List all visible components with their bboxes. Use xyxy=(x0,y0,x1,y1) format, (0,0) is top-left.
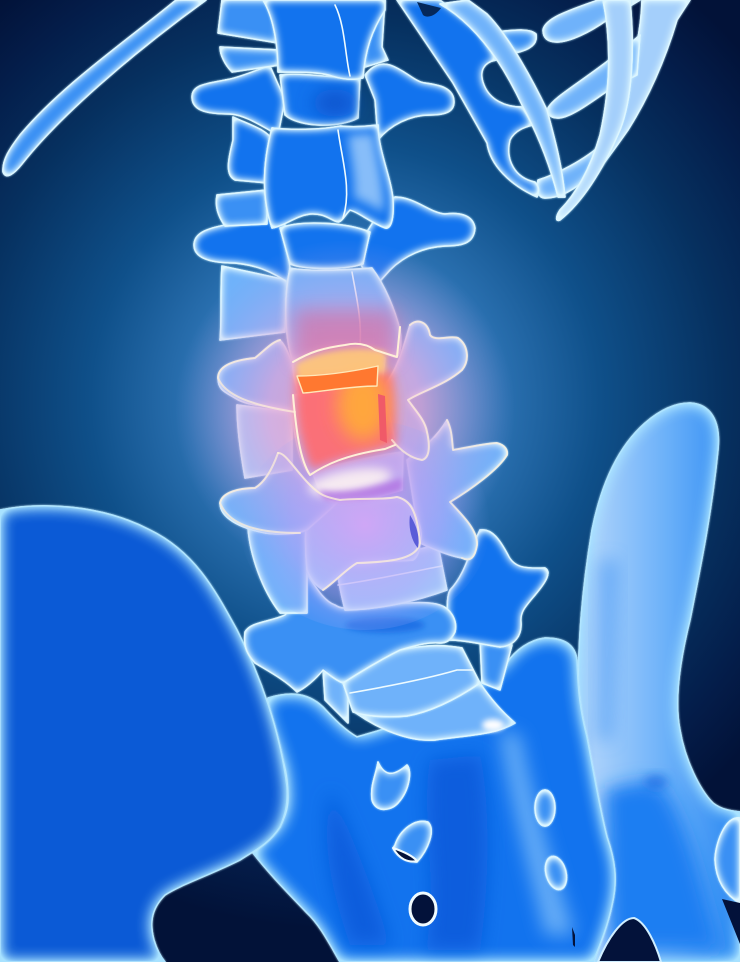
ribs: upper right rib cage xyxy=(397,0,690,220)
highlight: purple lower glow xyxy=(240,420,490,630)
vertebra L4 xyxy=(220,420,507,613)
sacrum: top platform xyxy=(356,683,515,740)
rib: stub xyxy=(495,30,536,53)
pain: pink upper body xyxy=(295,310,395,362)
L2: left lamina xyxy=(220,266,287,340)
sacrum: side foramen upper xyxy=(535,790,555,826)
pain: outline L4 left process xyxy=(220,453,300,533)
L3: body xyxy=(293,384,395,475)
L3: disc xyxy=(293,345,385,396)
L3: right process xyxy=(385,322,467,460)
pain: outline L2 body xyxy=(293,327,400,362)
wing: dark arch at bottom xyxy=(598,918,661,962)
L1: body xyxy=(264,125,393,228)
L1: left lamina xyxy=(228,117,272,183)
pain: L4 groove xyxy=(409,515,419,548)
sacrum: right ridge xyxy=(500,730,575,935)
pain: dark disc band xyxy=(297,366,378,393)
L4: left lamina xyxy=(248,525,307,613)
pain: red body xyxy=(296,372,396,470)
L5: left pedicle xyxy=(323,670,348,723)
pain: vertebra groove xyxy=(378,394,387,443)
rib: short middle xyxy=(548,35,640,118)
top: body xyxy=(263,0,385,79)
L5: right process xyxy=(447,530,548,647)
L5: disc xyxy=(343,646,480,717)
pain: outline right process xyxy=(392,322,467,460)
pelvis: left iliac bone xyxy=(0,506,287,962)
rib: far right pale xyxy=(562,0,690,212)
wing: body xyxy=(560,403,740,962)
wing: crease shading xyxy=(644,775,668,789)
wing: dark corner xyxy=(722,899,740,944)
wing: vertical shading xyxy=(598,560,618,740)
vertebra L2 xyxy=(194,197,475,362)
pain: outline L4 right process xyxy=(447,420,507,559)
highlight: lavender halo around pain xyxy=(175,240,515,580)
spine: lumbar vertebrae column xyxy=(192,0,548,723)
L4: left process xyxy=(220,453,340,534)
L5: transverse process xyxy=(245,565,456,692)
rib: short lower xyxy=(537,143,603,198)
L5: right pedicle xyxy=(480,640,512,690)
L3: left lamina xyxy=(237,405,292,478)
rib: curved pale front xyxy=(557,0,632,220)
wing: lower blue shading xyxy=(605,782,720,950)
top: left lower plate xyxy=(220,47,280,72)
rib: blade notch xyxy=(417,2,441,17)
L4: body xyxy=(306,497,421,590)
vertebra L3 xyxy=(218,322,467,502)
sacrum: upper foramen xyxy=(393,848,417,861)
L4: disc below xyxy=(337,545,447,610)
sacrum: dark central shading xyxy=(425,755,488,950)
L1: disc shading xyxy=(313,89,357,117)
rib: blade xyxy=(397,0,538,197)
L4: disc line xyxy=(338,566,442,585)
sacrum: upper foramen blob xyxy=(393,821,431,862)
L3: disc below xyxy=(312,452,403,502)
pain: outline L3 body xyxy=(293,395,395,475)
rib: curved crescent xyxy=(440,0,565,197)
vertebra L1 xyxy=(192,64,454,228)
vertebra L5 xyxy=(245,530,548,723)
pain: orange core xyxy=(337,369,389,441)
L5: process shading xyxy=(345,617,425,633)
pelvis: sacrum xyxy=(253,638,615,962)
top: right plate xyxy=(360,0,388,68)
pain: yellow disc top xyxy=(296,349,386,382)
L1: right transverse xyxy=(365,64,454,140)
L5: disc line xyxy=(350,670,473,693)
L2: disc xyxy=(280,223,370,268)
L2: body groove xyxy=(352,272,360,345)
sacrum: slit xyxy=(572,927,575,947)
sacrum: side foramen lower xyxy=(542,854,570,892)
L3: left process xyxy=(218,340,300,412)
top: body highlight xyxy=(335,5,350,76)
highlight: pain core xyxy=(218,310,507,590)
rib: short upper xyxy=(543,0,640,42)
pain: white disc glow xyxy=(307,463,393,501)
pain: outline L4 xyxy=(278,453,420,590)
rib: upper left xyxy=(3,0,206,176)
L4: right process xyxy=(407,420,507,559)
sacrum: lower foramen xyxy=(410,893,436,925)
sacrum: body xyxy=(253,638,615,962)
L1: left transverse xyxy=(192,66,285,135)
sacrum: dark left shading xyxy=(327,790,390,945)
top: left upper plate xyxy=(218,0,278,43)
sacrum: teardrop depression xyxy=(372,762,410,809)
pain: lower disc purple band xyxy=(318,478,402,501)
iliac: body xyxy=(0,506,287,962)
vertebra: top column xyxy=(218,0,388,79)
pain: outline left process xyxy=(218,340,295,412)
wing: right lobe xyxy=(715,818,740,903)
pelvis: right iliac wing xyxy=(560,403,740,962)
L2: body xyxy=(286,268,401,362)
L2: left transverse xyxy=(194,205,292,285)
L2: right transverse xyxy=(355,197,475,290)
L1: disc xyxy=(280,74,360,125)
L1: body groove xyxy=(338,130,347,218)
L1: lower plate xyxy=(216,190,267,226)
L1: body right pale side xyxy=(348,133,384,212)
sacrum: bright highlight xyxy=(482,719,504,731)
